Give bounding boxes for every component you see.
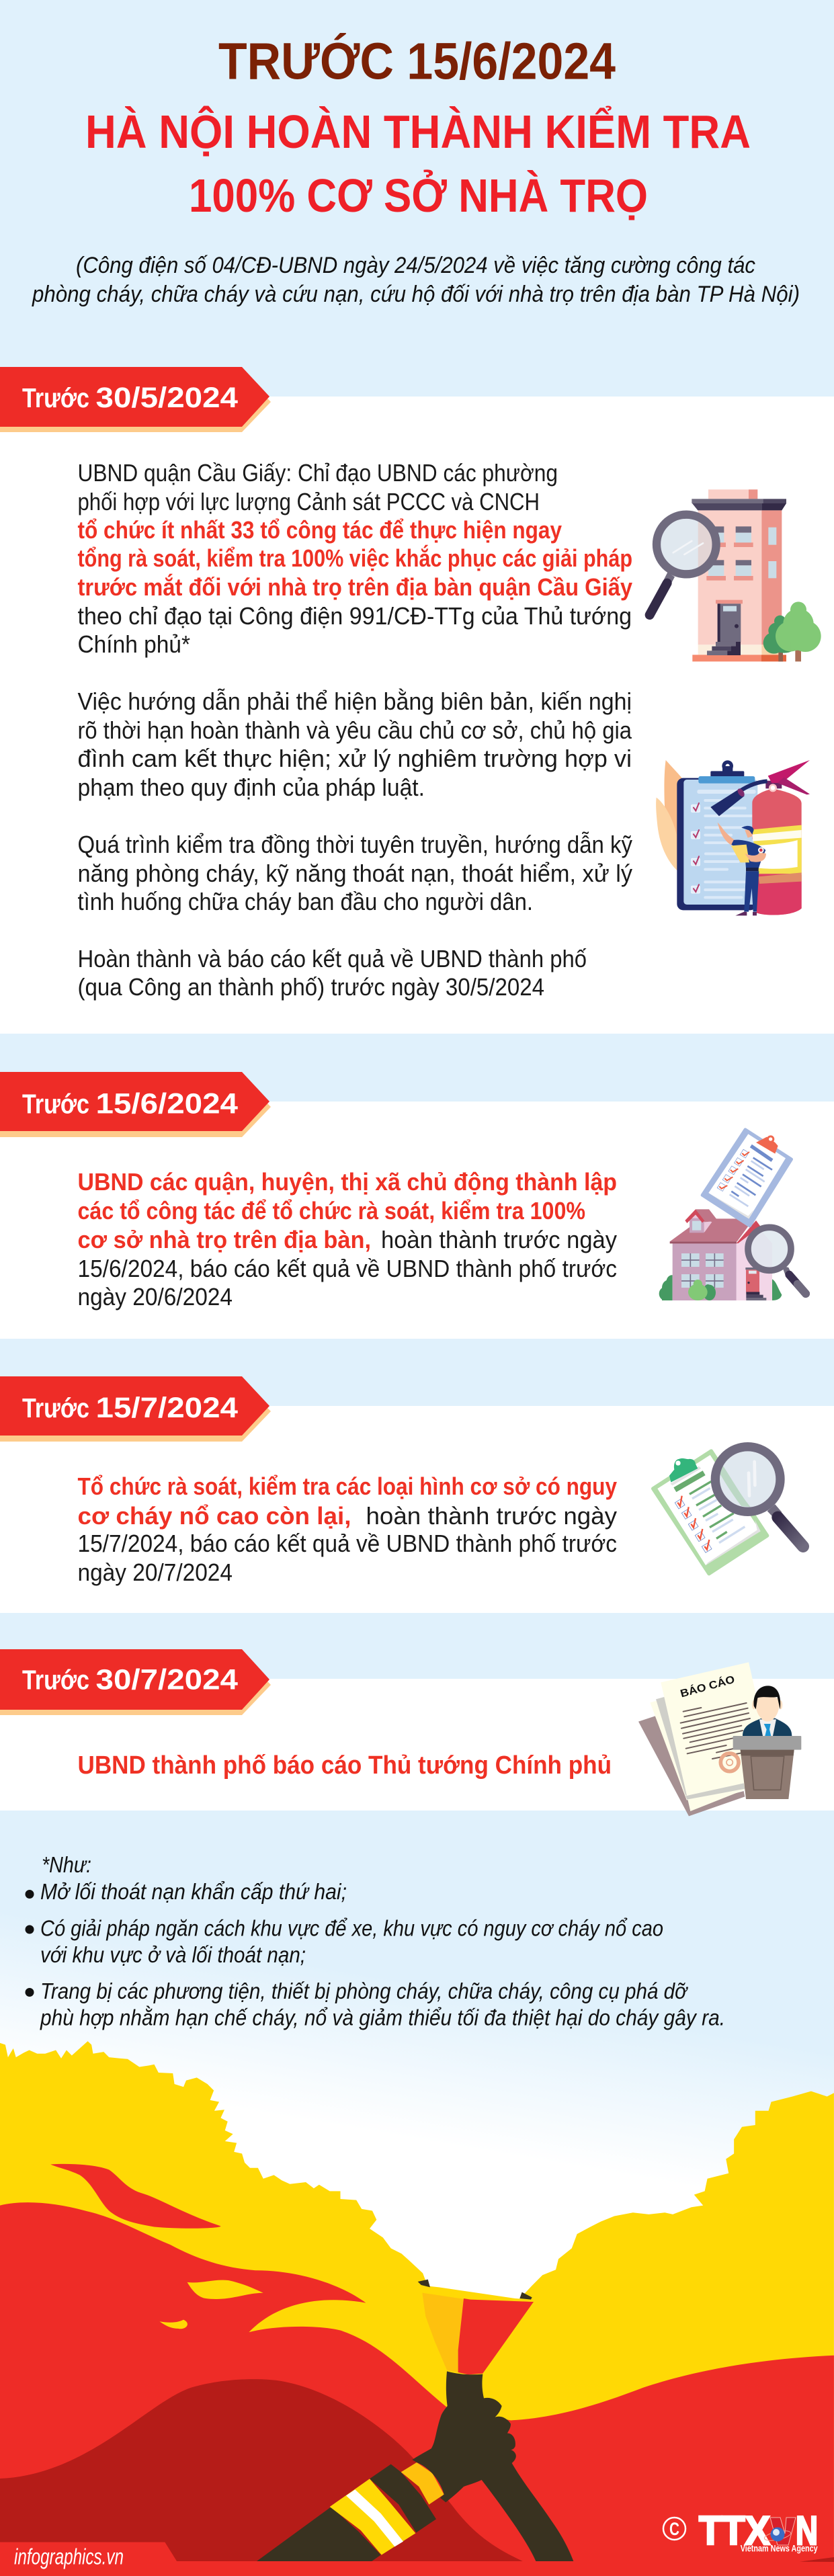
text block: first instruction: UBND quận Cầu Giấy: Chỉ đạo UBND các phường: [78, 459, 558, 487]
text block: districts: [78, 1168, 617, 1311]
text block: first instruction: phối hợp với lực lượng Cảnh sát PCCC và CNCH: [78, 488, 540, 515]
icon: building with magnifier: [650, 489, 821, 661]
text block: guidance record: [78, 688, 632, 801]
title: TRƯỚC 15/6/2024: [218, 32, 616, 90]
bullet note 1: Mở lối thoát nạn khẩn cấp thứ hai;: [40, 1879, 347, 1904]
date tag: 15/6/2024: 15/6/2024: [95, 1087, 238, 1120]
date tag: 15/7/2024: [0, 1376, 271, 1442]
logo: TTXVN copyright: N: [796, 2508, 818, 2553]
text block: high-risk facilities: ngày 20/7/2024: [78, 1559, 233, 1586]
notes: *Như:: [42, 1852, 91, 1877]
notes: [26, 1852, 725, 2030]
date tag: 15/6/2024: Trước: [22, 1089, 89, 1120]
date tag: 30/5/2024: [0, 367, 271, 432]
icon: report and speaker at podium: BÁO CÁO: [679, 1673, 736, 1700]
text block: districts: các tổ công tác để tổ chức rà soát, kiểm tra 100%: [78, 1197, 585, 1224]
text block: propaganda: Quá trình kiểm tra đồng thời tuyên truyền, hướng dẫn kỹ: [78, 831, 632, 858]
date tag: 15/6/2024: [0, 1072, 271, 1137]
text block: high-risk facilities: 15/7/2024, báo cáo kết quả về UBND thành phố trước: [78, 1530, 617, 1557]
date tag: 15/7/2024: Trước: [22, 1393, 89, 1423]
panel: before 15/7/2024: [0, 1376, 834, 1613]
date tag: 30/5/2024: Trước: [22, 382, 89, 413]
title: [85, 32, 751, 222]
text block: first instruction: theo chỉ đạo tại Công điện 991/CĐ-TTg của Thủ tướng: [78, 602, 632, 630]
date tag: 30/7/2024: Trước: [22, 1664, 89, 1695]
text block: report to prime minister: UBND thành phố báo cáo Thủ tướng Chính phủ: [78, 1751, 612, 1780]
phoenix nostril: [159, 2320, 187, 2329]
text block: propaganda: năng phòng cháy, kỹ năng thoát nạn, thoát hiểm, xử lý: [78, 860, 632, 887]
text block: guidance record: rõ thời hạn hoàn thành và yêu cầu chủ cơ sở, chủ hộ gia: [78, 716, 632, 744]
phoenix eye: [187, 2280, 263, 2299]
text block: districts: hoàn thành trước ngày: [381, 1226, 617, 1253]
text block: high-risk facilities: Tổ chức rà soát, kiểm tra các loại hình cơ sở có nguy: [78, 1472, 617, 1500]
logo: TTXVN copyright: TTX: [699, 2508, 770, 2553]
text block: guidance record: đình cam kết thực hiện; xử lý nghiêm trường hợp vi: [78, 745, 632, 772]
text block: high-risk facilities: hoàn thành trước ngày: [366, 1502, 617, 1530]
date tag: 30/7/2024: 30/7/2024: [95, 1664, 238, 1696]
icon: report and speaker at podium: [638, 1662, 801, 1816]
date tag: 30/7/2024: [0, 1649, 271, 1715]
text block: high-risk facilities: [78, 1472, 617, 1586]
logo: TTXVN copyright: C: [669, 2519, 679, 2539]
hose nozzle, hand and sleeve: [257, 2280, 573, 2561]
flame crest: [50, 2164, 220, 2229]
subtitle: (Công điện số 04/CĐ-UBND ngày 24/5/2024 về việc tăng cường công tác: [76, 253, 755, 278]
icon: checklist and magnifier: [653, 1447, 803, 1574]
bullet note 3: Trang bị các phương tiện, thiết bị phòng cháy, chữa cháy, công cụ phá dỡ: [40, 1979, 689, 2003]
logo: TTXVN copyright: [663, 2508, 818, 2554]
bullet note 2: [26, 1915, 663, 1967]
illustration: flames and water spray: [0, 2041, 834, 2576]
text block: report deadline: Hoàn thành và báo cáo kết quả về UBND thành phố: [78, 945, 587, 972]
text block: districts: cơ sở nhà trọ trên địa bàn,: [78, 1226, 371, 1253]
text block: guidance record: phạm theo quy định của pháp luật.: [78, 774, 425, 801]
text block: high-risk facilities: cơ cháy nổ cao còn lại,: [78, 1502, 351, 1530]
text block: first instruction: Chính phủ*: [78, 630, 190, 658]
text block: districts: ngày 20/6/2024: [78, 1283, 233, 1311]
text block: first instruction: tổng rà soát, kiểm tra 100% việc khắc phục các giải pháp: [78, 544, 632, 572]
text block: first instruction: tổ chức ít nhất 33 tổ công tác để thực hiện ngay: [78, 516, 562, 544]
dark red layer: [0, 2379, 524, 2562]
text block: first instruction: trước mắt đối với nhà trọ trên địa bàn quận Cầu Giấy: [78, 573, 632, 601]
text block: report deadline: (qua Công an thành phố) trước ngày 30/5/2024: [78, 973, 544, 1001]
icon: clipboard, extinguisher and firefighter: [656, 760, 810, 915]
title: 100% CƠ SỞ NHÀ TRỌ: [189, 169, 648, 222]
text block: first instruction: [78, 459, 632, 658]
date tag: 30/5/2024: 30/5/2024: [95, 382, 238, 414]
date tag: 15/7/2024: 15/7/2024: [95, 1392, 238, 1424]
panel: before 15/6/2024: [0, 1072, 834, 1339]
text block: report deadline: [78, 945, 587, 1001]
subtitle: [32, 253, 800, 307]
panel: before 30/5/2024: [0, 367, 834, 1034]
footer source: infographics.vn: [14, 2544, 124, 2569]
bullet note 3: phù hợp nhằm hạn chế cháy, nổ và giảm thiểu tối đa thiệt hại do cháy gây ra.: [40, 2005, 725, 2030]
panel: before 30/7/2024: [0, 1649, 834, 1816]
icon: house, clipboard and magnifier: [659, 1130, 806, 1300]
text block: propaganda: tình huống chữa cháy ban đầu cho người dân.: [78, 888, 533, 915]
title: HÀ NỘI HOÀN THÀNH KIỂM TRA: [85, 105, 751, 158]
text block: guidance record: Việc hướng dẫn phải thể hiện bằng biên bản, kiến nghị: [78, 688, 632, 715]
red flame body: [0, 2202, 834, 2576]
bullet note 2: với khu vực ở và lối thoát nạn;: [40, 1942, 306, 1967]
yellow spray: [0, 2041, 834, 2576]
text block: districts: 15/6/2024, báo cáo kết quả về UBND thành phố trước: [78, 1255, 617, 1282]
bullet note 3: [26, 1979, 725, 2030]
text block: districts: UBND các quận, huyện, thị xã chủ động thành lập: [78, 1168, 617, 1196]
bullet note 2: Có giải pháp ngăn cách khu vực để xe, khu vực có nguy cơ cháy nổ cao: [40, 1915, 663, 1941]
footer tab: [0, 2542, 177, 2562]
text block: propaganda: [78, 831, 632, 915]
